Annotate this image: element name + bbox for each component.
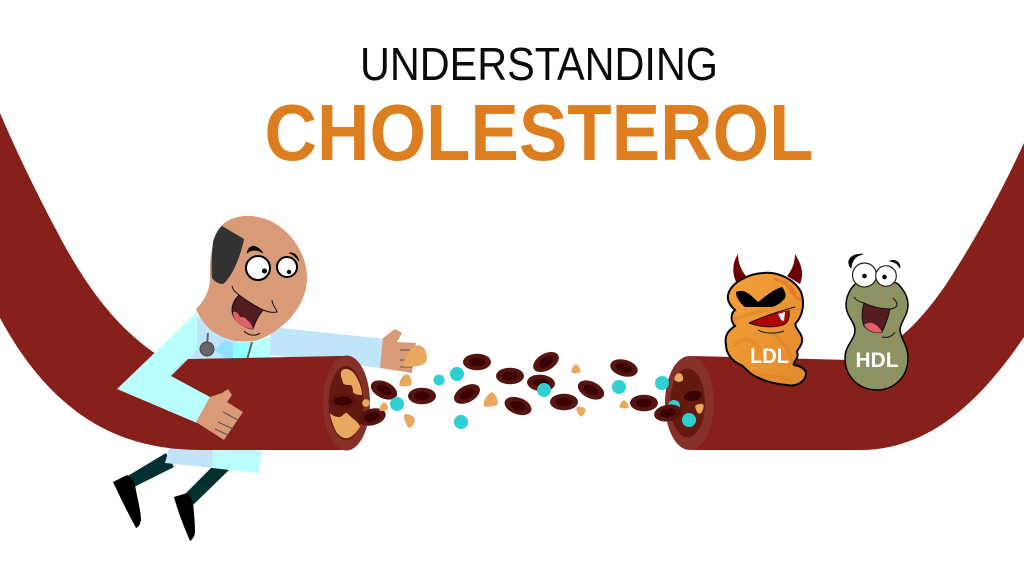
LDL eyes [736,287,786,307]
HDL mouth [854,297,897,337]
HDL body [845,280,908,390]
hair [212,226,244,284]
front cells in tubes [653,402,696,427]
stethoscope [200,333,252,360]
cholesterol particles [380,346,703,427]
title line: understanding: UNDERSTANDING [360,38,718,90]
doctor legs and shoes [113,453,229,541]
mouth [232,286,277,335]
title line: cholesterol: CHOLESTEROL [264,88,814,177]
artery: left tube opening [323,356,370,450]
LDL label: LDL [750,345,789,368]
artery: right [692,143,1024,450]
LDL body [726,273,806,386]
doctor right sleeve [270,327,385,368]
blood cells [356,348,658,429]
eyes [246,246,299,280]
doctor lower hand [196,389,243,440]
LDL mouth [749,307,795,333]
LDL skin texture [732,279,801,380]
LDL character [726,254,806,386]
HDL label: HDL [856,349,899,372]
title [264,38,814,177]
HDL eyes [849,254,900,287]
teal particles [390,367,680,429]
artery: left [0,113,347,450]
horns [733,254,802,284]
doctor head [196,216,307,342]
doctor raised hand [380,329,416,373]
artery: right tube opening [665,356,714,450]
HDL character [845,254,908,390]
doctor left sleeve [117,312,210,423]
doctor coat torso [165,316,272,473]
